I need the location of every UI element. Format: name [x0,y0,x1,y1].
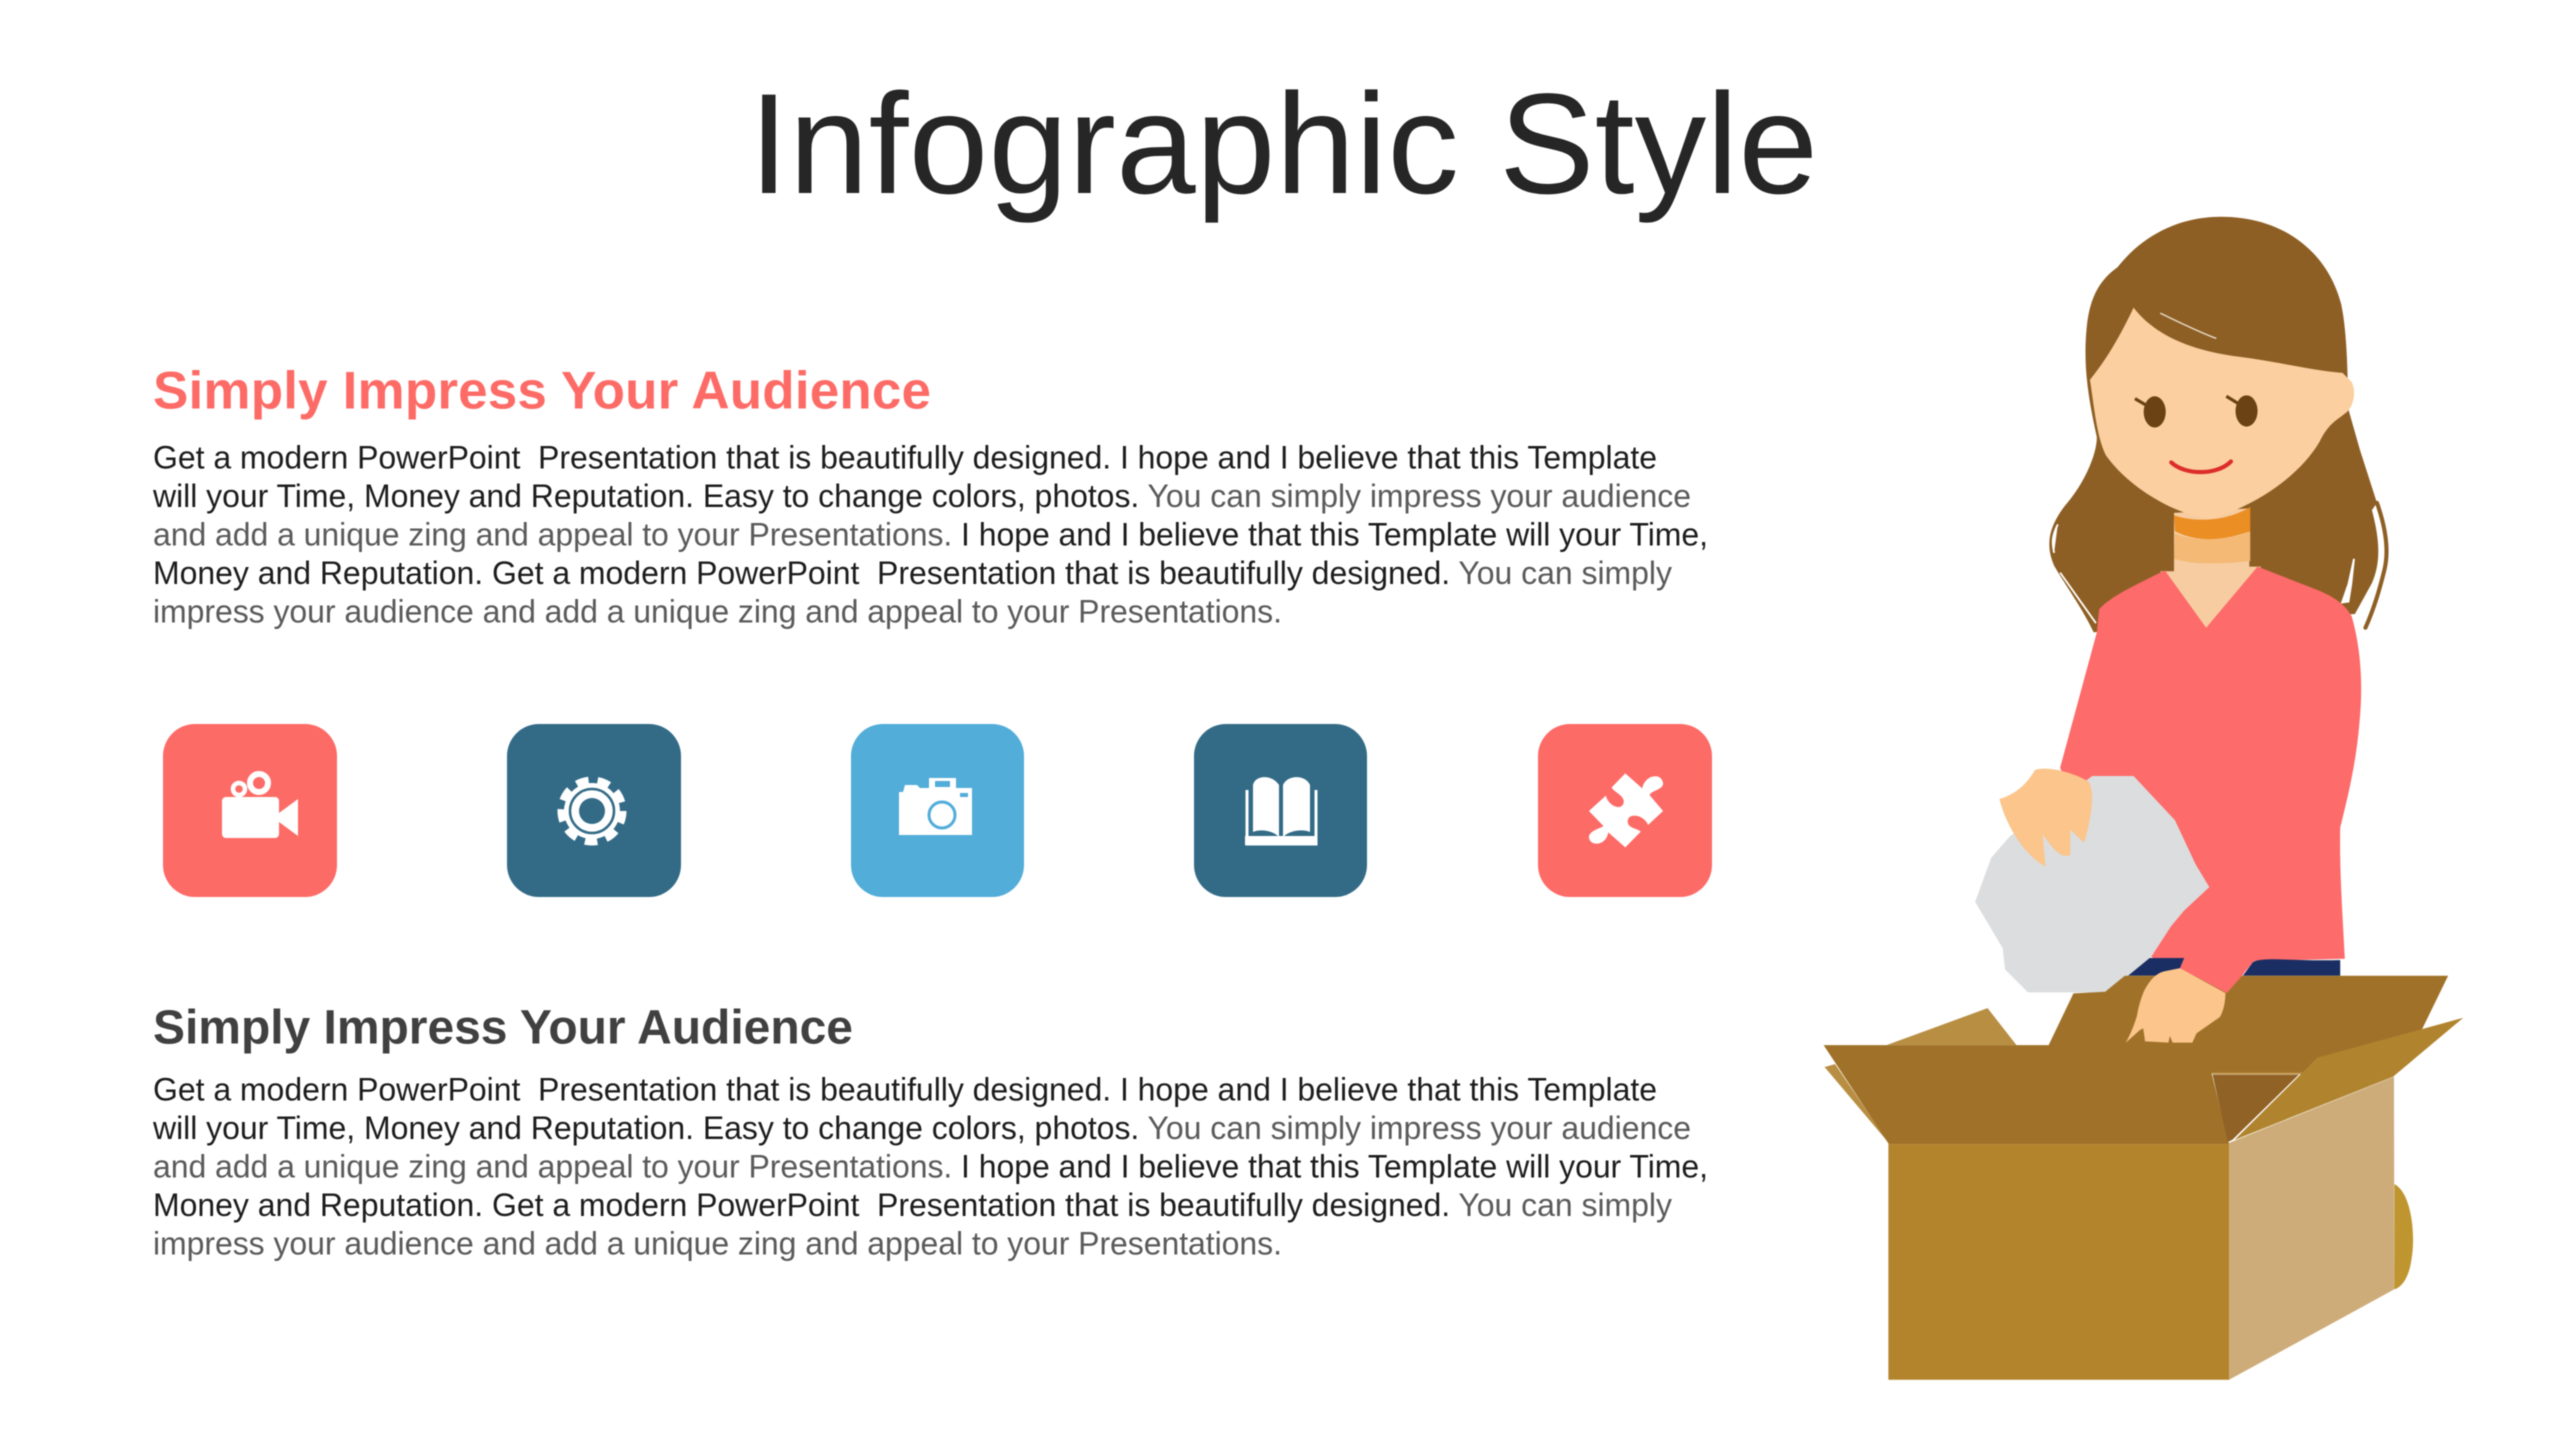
text block: bottom paragraph [152,1072,1708,1262]
eyes [2135,395,2258,428]
right side [2229,1077,2394,1380]
hair [2049,217,2378,632]
icon: puzzle piece [1538,724,1712,897]
text block: top paragraph [152,440,1708,630]
neck [2160,508,2261,631]
inner shadow [2213,1075,2299,1142]
icon row [163,724,1712,897]
icon: book [1194,724,1367,897]
illustration: woman packing a box [1824,217,2463,1380]
text block: bottom paragraph: Money and Reputation. Get a modern PowerPoint Presentation that is beautifully designed. You can simply [153,1187,1672,1223]
title: Infographic Style [749,65,1818,224]
sleeve cuff in front of the flap [2180,953,2258,993]
cardboard box [1824,953,2463,1380]
mouth [2171,461,2231,472]
text block: bottom paragraph: impress your audience and add a unique zing and appeal to your Presentations. [153,1226,1282,1262]
woman [1975,217,2386,993]
icon: video camera [163,724,337,897]
crumpled paper [1975,776,2209,992]
left back flap [1887,1008,2016,1045]
text block: top paragraph: will your Time, Money and Reputation. Easy to change colors, photos. You can simply impress your audience [152,478,1691,514]
text block: bottom paragraph: Get a modern PowerPoint Presentation that is beautifully designed. I hope and I believe that this Template [153,1072,1657,1108]
trousers [2128,958,2340,976]
text block: top paragraph: impress your audience and add a unique zing and appeal to your Presentations. [153,594,1282,630]
heading: top section: Simply Impress Your Audience [153,362,931,420]
back flap [2049,976,2448,1083]
text block: bottom paragraph: and add a unique zing and appeal to your Presentations. I hope and I believe that this Template will your Time, [153,1148,1708,1184]
heading: bottom section: Simply Impress Your Audience [153,1002,853,1054]
text block: top paragraph: and add a unique zing and appeal to your Presentations. I hope and I believe that this Template will your Time, [153,516,1708,552]
icon: photo camera [851,724,1024,897]
sweater [2060,567,2361,993]
right flap [2235,1018,2463,1140]
tape roll [2394,1184,2413,1289]
face [2090,308,2354,519]
text block: top paragraph: Money and Reputation. Get a modern PowerPoint Presentation that is beautifully designed. You can simply [153,555,1672,591]
icon: gear [507,724,681,897]
front flap [1824,1045,2229,1144]
text block: bottom paragraph: will your Time, Money and Reputation. Easy to change colors, photos. You can simply impress your audience [152,1110,1691,1146]
text block: top paragraph: Get a modern PowerPoint Presentation that is beautifully designed. I hope and I believe that this Template [153,440,1657,476]
left hand [1999,769,2092,867]
right hand [2126,968,2225,1043]
front face [1888,1144,2229,1380]
